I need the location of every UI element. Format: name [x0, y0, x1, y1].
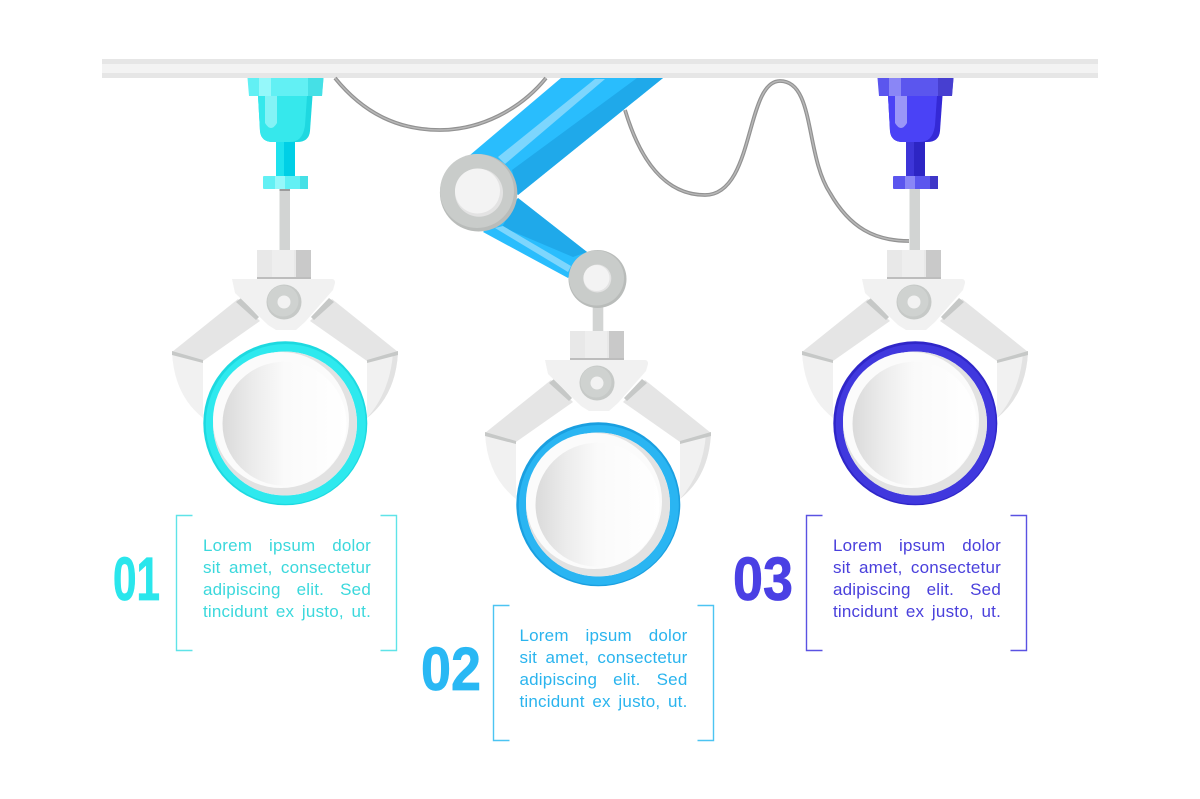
text block 3: adipiscing elit. Sed	[833, 580, 1001, 599]
text block 1: adipiscing elit. Sed	[203, 580, 371, 599]
gripper 1 with cyan ring	[172, 250, 398, 505]
cyan mount and rod	[248, 78, 324, 250]
number 01: 01	[113, 545, 160, 613]
text block 1: tincidunt ex justo, ut.	[203, 602, 371, 621]
text block 3	[833, 536, 1001, 621]
bracket frame 1	[176, 516, 396, 650]
robot arm: wrist joint and rod	[568, 250, 626, 331]
text block 2	[520, 626, 688, 711]
text block 2: tincidunt ex justo, ut.	[520, 692, 688, 711]
number 02: 02	[421, 635, 481, 703]
text block 3: sit amet, consectetur	[833, 558, 1001, 577]
number 03: 03	[733, 545, 793, 613]
cable: left slack wire	[335, 78, 546, 130]
text block 2: adipiscing elit. Sed	[520, 670, 688, 689]
cable: right wavy wire	[625, 81, 909, 241]
ceiling rail	[102, 59, 1098, 78]
gripper 3 with indigo ring	[802, 250, 1028, 505]
text block 1: sit amet, consectetur	[203, 558, 371, 577]
gripper 2 with blue ring	[485, 331, 711, 586]
robot arm: lower segment	[483, 198, 587, 278]
text block 3: tincidunt ex justo, ut.	[833, 602, 1001, 621]
blue mount and rod	[878, 78, 954, 250]
bracket frame 3	[806, 516, 1026, 650]
text block 2: Lorem ipsum dolor	[520, 626, 688, 645]
text block 1: Lorem ipsum dolor	[203, 536, 371, 555]
bracket frame 2	[494, 606, 714, 740]
robot arm: upper segment	[470, 78, 663, 195]
text block 2: sit amet, consectetur	[520, 648, 688, 667]
text block 1	[203, 536, 371, 621]
text block 3: Lorem ipsum dolor	[833, 536, 1001, 555]
robot arm: elbow joint	[440, 154, 517, 232]
